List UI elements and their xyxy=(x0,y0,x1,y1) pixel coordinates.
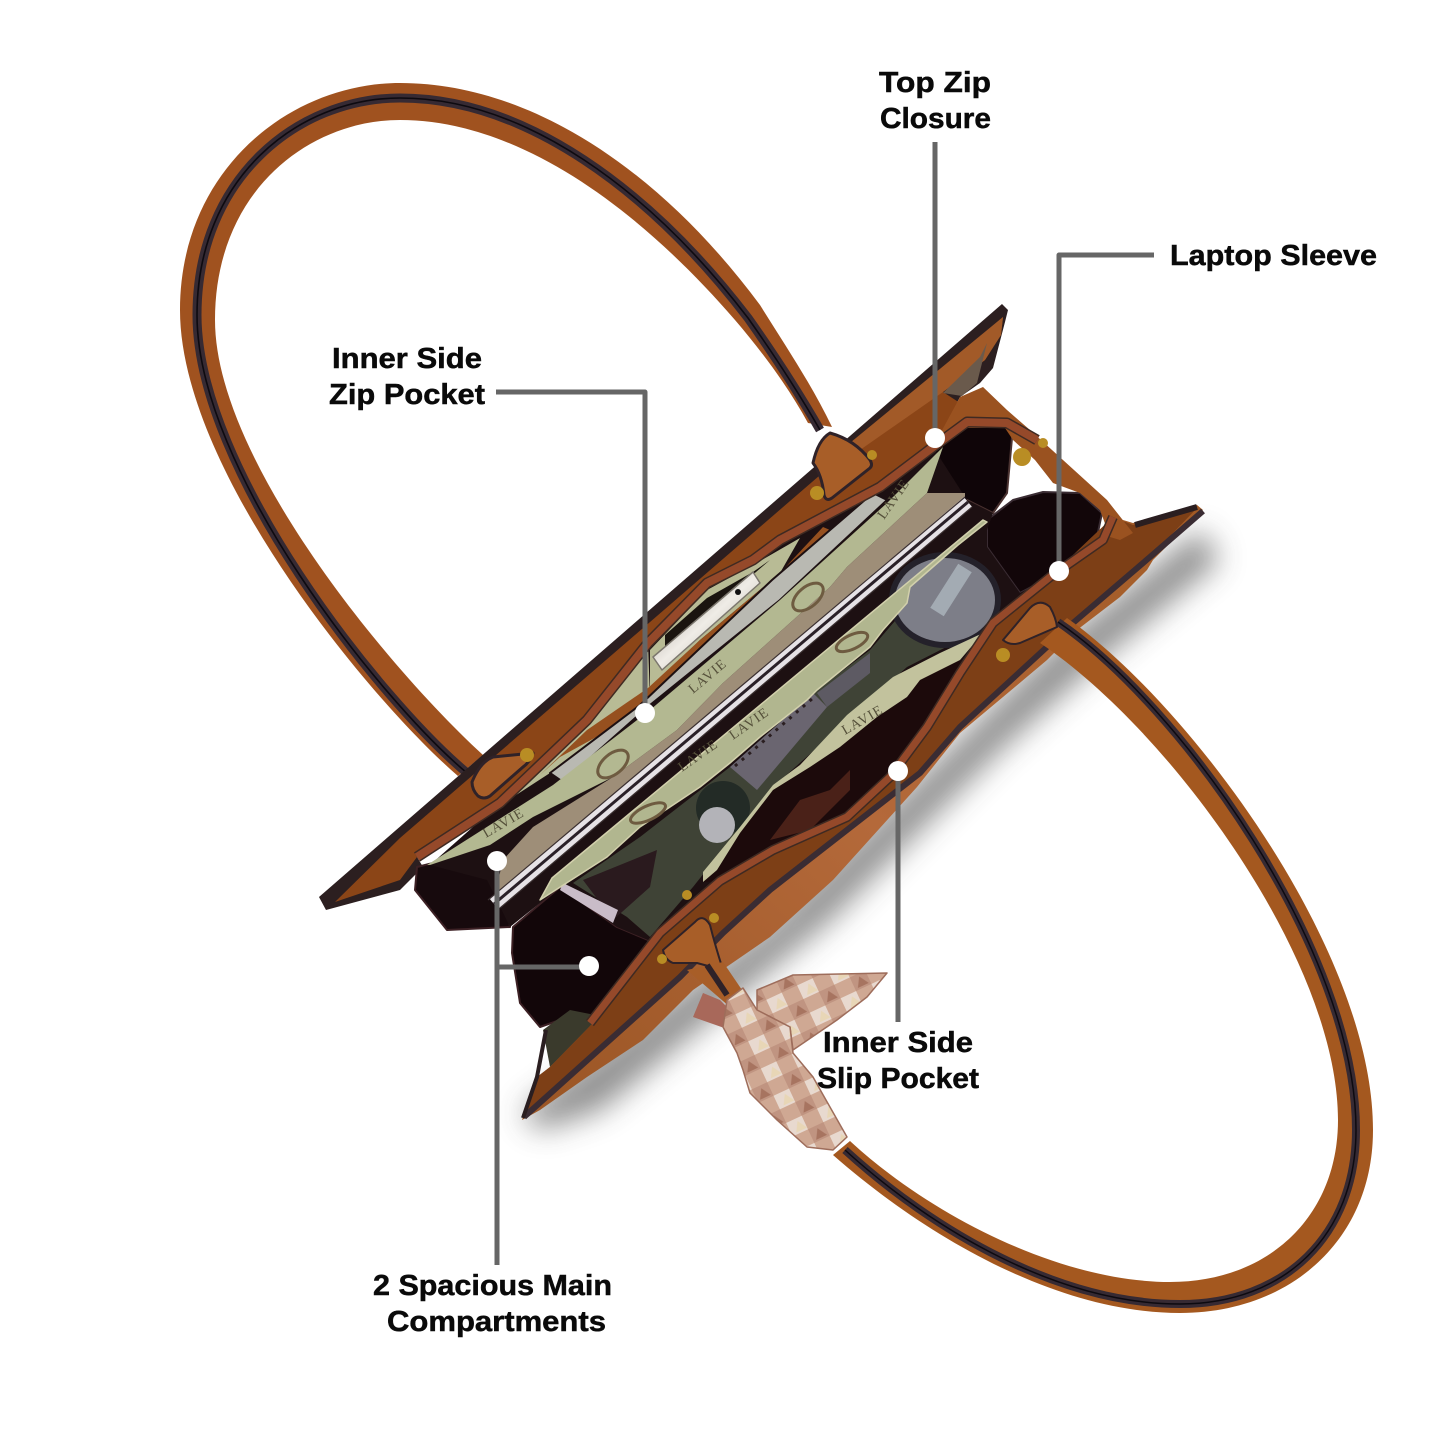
callout: inner side slip pocket: Slip Pocket xyxy=(817,1063,979,1095)
notebook xyxy=(550,493,887,782)
small bottle xyxy=(696,781,750,843)
slip pocket sage flap xyxy=(703,633,983,882)
brand text on lining: LAVIE xyxy=(727,705,772,743)
callout: inner side zip pocket: Inner Side xyxy=(332,343,482,375)
callout: top zip closure xyxy=(879,67,991,448)
scarf right wing xyxy=(757,973,887,1050)
callout: laptop sleeve: Laptop Sleeve xyxy=(1170,240,1377,272)
water bottle xyxy=(889,552,1001,648)
callout: 2 spacious main compartments: 2 Spacious Main xyxy=(373,1270,612,1302)
callout: inner side slip pocket: Inner Side xyxy=(823,1027,973,1059)
white label xyxy=(560,883,618,923)
lining logo marks xyxy=(593,578,870,827)
tab: top back xyxy=(813,433,872,499)
pocket: left main compartment xyxy=(415,847,510,930)
pocket: lower main compartment xyxy=(512,887,660,1027)
gold studs xyxy=(520,438,1048,964)
brand text on lining: LAVIE xyxy=(686,657,730,697)
back sage strip xyxy=(427,447,943,865)
laptop taupe lid xyxy=(494,493,965,898)
scarf left wing xyxy=(693,993,730,1030)
tab: right front xyxy=(1003,603,1057,644)
end gusset and strap xyxy=(933,387,1133,540)
phone in zip pocket xyxy=(653,572,760,670)
item in slip pocket xyxy=(770,770,850,840)
front zip tape xyxy=(590,517,1113,1023)
callout: top zip closure: Top Zip xyxy=(879,67,991,99)
sage divider xyxy=(540,520,987,900)
scarf wrapped band xyxy=(723,988,847,1150)
brand text on lining: LAVIE xyxy=(840,703,886,738)
olive compartment xyxy=(573,607,960,937)
callout: inner side zip pocket xyxy=(329,343,655,723)
twilly scarf xyxy=(693,973,887,1150)
callout: laptop sleeve xyxy=(1049,240,1377,581)
tab: lower front xyxy=(663,918,723,970)
shoulder handle: front xyxy=(833,618,1373,1313)
handle stub under scarf xyxy=(687,962,742,1007)
shoulder handle: back xyxy=(180,83,832,776)
small lining sliver near front corner xyxy=(543,1010,600,1067)
callout: 2 spacious main compartments: Compartments xyxy=(387,1306,606,1338)
callout: inner side zip pocket: Zip Pocket xyxy=(329,379,485,411)
zip pocket area xyxy=(490,527,830,812)
callout: inner side slip pocket xyxy=(817,761,979,1095)
back panel xyxy=(319,304,1008,910)
shoe in compartment xyxy=(583,850,657,920)
brand text on lining: LAVIE xyxy=(480,806,527,841)
laptop sleeve pocket xyxy=(987,492,1102,593)
central interior xyxy=(430,447,1050,940)
callout: top zip closure: Closure xyxy=(880,103,991,135)
brand text on lining: LAVIE xyxy=(875,477,913,522)
callout: 2 spacious main compartments xyxy=(373,851,612,1338)
brand text on lining xyxy=(480,477,913,841)
top zip tape xyxy=(417,422,1037,857)
drop shadow under bag xyxy=(522,530,1220,1130)
grey item xyxy=(730,653,870,790)
slip pocket interior xyxy=(703,660,960,882)
laptop silver edge xyxy=(488,497,972,908)
tab: lower back xyxy=(472,753,533,798)
brand text on lining: LAVIE xyxy=(676,737,721,775)
front panel xyxy=(522,505,1203,1120)
pocket: right end of top compartment xyxy=(920,423,1013,513)
